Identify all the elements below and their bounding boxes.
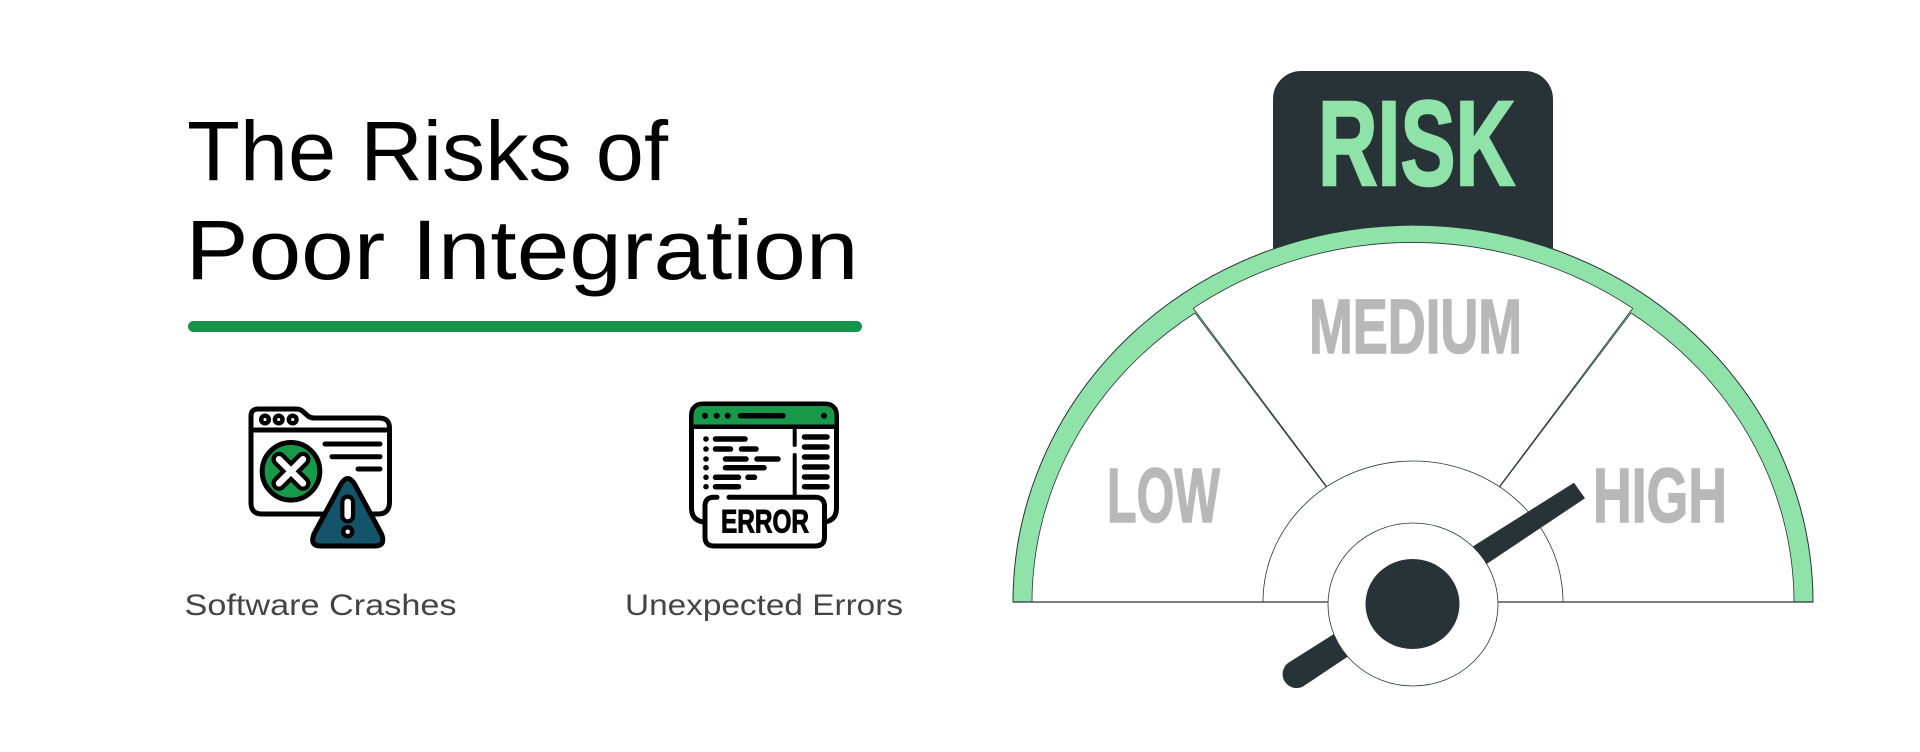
risk gauge [1013, 225, 1813, 688]
needle [1283, 483, 1585, 688]
title: The Risks of [187, 104, 669, 198]
hub ring [1328, 523, 1498, 686]
sector: high [1413, 313, 1794, 602]
hub centre [1366, 559, 1460, 649]
gauge outer green band [1013, 225, 1813, 602]
risk heading: RISK [1318, 76, 1515, 211]
label: unexpected errors: Unexpected Errors [625, 589, 903, 622]
sector: low [1032, 313, 1413, 602]
inner dial arc [1263, 461, 1563, 602]
label: low: LOW [1107, 453, 1220, 539]
label: medium: MEDIUM [1309, 284, 1522, 370]
title [186, 104, 858, 297]
icon: software crashes [251, 409, 390, 546]
title: Poor Integration [186, 203, 858, 297]
label: high: HIGH [1593, 453, 1727, 539]
icon: unexpected errors: ERROR [721, 504, 809, 540]
icon: unexpected errors [691, 404, 837, 546]
gauge baseline [1013, 601, 1813, 603]
label: software crashes: Software Crashes [184, 589, 456, 622]
title underline [188, 321, 862, 332]
sector: medium [1193, 242, 1633, 602]
risk header tab [1273, 71, 1553, 300]
